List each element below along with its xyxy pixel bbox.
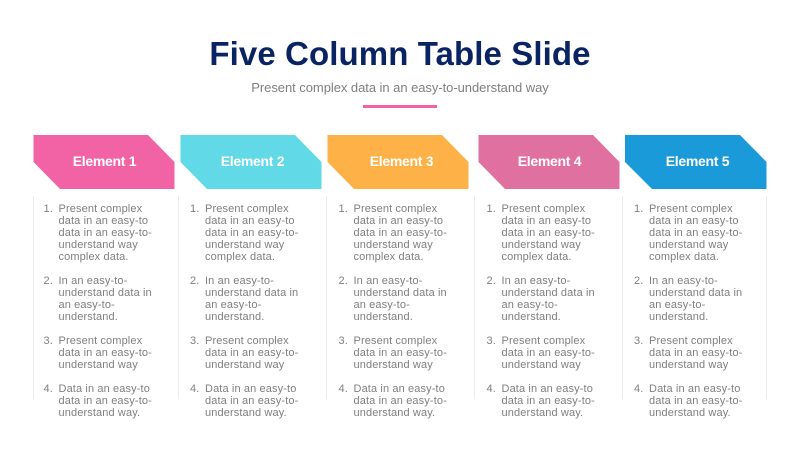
list item 2: In an easy-to-	[649, 275, 718, 287]
list item 4: understand way.	[502, 407, 583, 419]
list item 2	[486, 275, 595, 323]
list item 2: understand.	[502, 311, 561, 323]
panel: element 5: 2.	[634, 275, 643, 287]
list item 1: data in an easy-to-	[649, 227, 742, 239]
list item 2: In an easy-to-	[502, 275, 570, 287]
panel: element 3: 3.	[338, 335, 348, 347]
list item 4: data in an easy-to-	[649, 395, 742, 407]
panel: element 3	[328, 135, 468, 419]
list item 4	[44, 383, 152, 419]
panel: element 2: 2.	[190, 275, 199, 287]
list item 3: data in an easy-to-	[205, 347, 298, 359]
panel: element 2: 3.	[190, 335, 199, 347]
panel: element 2: 1.	[190, 203, 199, 215]
list item 3: Present complex	[649, 335, 733, 347]
list item 3: understand way	[205, 359, 284, 371]
list item 2	[634, 275, 742, 323]
list item 4: understand way.	[649, 407, 731, 419]
list item 4: Data in an easy-to	[205, 383, 296, 395]
header: element 5	[625, 135, 766, 189]
panel: element 3: 2.	[338, 275, 348, 287]
list item 4	[338, 383, 447, 419]
list item 1: Present complex	[205, 203, 289, 215]
list item 4: data in an easy-to-	[502, 395, 595, 407]
list item 1: data in an easy-to-	[354, 227, 447, 239]
panel: element 4: 1.	[486, 203, 496, 215]
panel: element 5: 4.	[634, 383, 643, 395]
list item 3: Present complex	[502, 335, 585, 347]
list item 4: Data in an easy-to	[354, 383, 445, 395]
panel: element 1: 1.	[44, 203, 53, 215]
header: element 3	[328, 135, 468, 189]
header: element 4	[478, 135, 620, 189]
list item 1	[190, 203, 298, 263]
panel: element 5: 1.	[634, 203, 643, 215]
list item 1: complex data.	[502, 251, 572, 263]
list item 1: understand way	[58, 239, 138, 251]
panel: element 3: 4.	[338, 383, 348, 395]
panel: element 2: 4.	[190, 383, 199, 395]
header: element 5: Element 5	[666, 153, 729, 169]
panel: element 3: 1.	[338, 203, 348, 215]
list item 2	[44, 275, 152, 323]
header: element 2	[180, 135, 322, 189]
list item 2: understand.	[354, 311, 413, 323]
list item 2: an easy-to-	[649, 299, 705, 311]
list item 3: understand way	[58, 359, 138, 371]
panel: element 2	[180, 135, 322, 419]
panel: element 1: 4.	[44, 383, 53, 395]
list item 1: understand way	[649, 239, 728, 251]
list item 2: an easy-to-	[502, 299, 558, 311]
list item 3: Present complex	[205, 335, 289, 347]
list item 2: an easy-to-	[354, 299, 410, 311]
list item 2: understand data in	[354, 287, 447, 299]
list item 1: understand way	[354, 239, 433, 251]
list item 2	[338, 275, 447, 323]
list item 3: data in an easy-to-	[58, 347, 152, 359]
list item 2: understand.	[58, 311, 118, 323]
list item 1: Present complex	[649, 203, 733, 215]
list item 2: understand data in	[649, 287, 742, 299]
list item 4: understand way.	[354, 407, 435, 419]
list item 1	[634, 203, 742, 263]
list item 4	[634, 383, 742, 419]
list item 4	[190, 383, 298, 419]
list item 4: Data in an easy-to	[649, 383, 740, 395]
list item 1: understand way	[205, 239, 284, 251]
header: element 3: Element 3	[370, 153, 433, 169]
list item 4: data in an easy-to-	[354, 395, 447, 407]
list item 3: understand way	[354, 359, 433, 371]
panel: element 1: 3.	[44, 335, 53, 347]
list item 1: complex data.	[354, 251, 424, 263]
list item 2: an easy-to-	[205, 299, 261, 311]
list item 1: complex data.	[205, 251, 275, 263]
list item 4: understand way.	[205, 407, 287, 419]
list item 3: understand way	[649, 359, 728, 371]
list item 4: Data in an easy-to	[502, 383, 593, 395]
list item 1: data in an easy-to-	[502, 227, 595, 239]
list item 1: Present complex	[502, 203, 585, 215]
list item 4: data in an easy-to-	[58, 395, 152, 407]
list item 4: Data in an easy-to	[58, 383, 150, 395]
panel: element 5	[625, 135, 766, 419]
list item 1: Present complex	[354, 203, 437, 215]
list item 2: understand data in	[58, 287, 152, 299]
panel: element 4	[478, 135, 620, 419]
list item 1: data in an easy-to-	[205, 227, 298, 239]
list item 3	[634, 335, 742, 371]
list item 4	[486, 383, 595, 419]
list item 2: understand.	[649, 311, 708, 323]
list item 3: Present complex	[58, 335, 142, 347]
title: Five Column Table Slide	[209, 35, 591, 72]
list item 1: data in an easy-to	[58, 215, 148, 227]
list item 1: data in an easy-to	[205, 215, 295, 227]
list item 2: In an easy-to-	[354, 275, 422, 287]
list item 2: understand.	[205, 311, 264, 323]
header: element 1: Element 1	[73, 153, 136, 169]
list item 2: In an easy-to-	[205, 275, 274, 287]
list item 2: In an easy-to-	[58, 275, 127, 287]
list item 3	[338, 335, 447, 371]
list item 1	[338, 203, 447, 263]
panel: element 1: 2.	[44, 275, 53, 287]
list item 4: understand way.	[58, 407, 140, 419]
list item 1: Present complex	[58, 203, 142, 215]
subtitle: Present complex data in an easy-to-understand way	[251, 80, 549, 95]
list item 2: understand data in	[502, 287, 595, 299]
list item 3: Present complex	[354, 335, 437, 347]
header: element 1	[34, 135, 174, 189]
panel: element 4: 4.	[486, 383, 496, 395]
list item 3: data in an easy-to-	[354, 347, 447, 359]
header: element 2: Element 2	[221, 153, 284, 169]
list item 1: data in an easy-to	[354, 215, 443, 227]
list item 1: understand way	[502, 239, 581, 251]
list item 3: data in an easy-to-	[502, 347, 595, 359]
list item 3	[44, 335, 152, 371]
list item 2: an easy-to-	[58, 299, 115, 311]
list item 1: complex data.	[649, 251, 719, 263]
list item 1: complex data.	[58, 251, 129, 263]
list item 3	[190, 335, 298, 371]
list item 4: data in an easy-to-	[205, 395, 298, 407]
list item 3: data in an easy-to-	[649, 347, 742, 359]
list item 1	[486, 203, 595, 263]
panel: element 4: 2.	[486, 275, 496, 287]
list item 3: understand way	[502, 359, 581, 371]
header: element 4: Element 4	[518, 153, 581, 169]
list item 1	[44, 203, 152, 263]
panel: element 4: 3.	[486, 335, 496, 347]
panel: element 5: 3.	[634, 335, 643, 347]
panel: element 1	[34, 135, 174, 419]
list item 2: understand data in	[205, 287, 298, 299]
list item 3	[486, 335, 595, 371]
title underline	[363, 105, 437, 108]
list item 1: data in an easy-to-	[58, 227, 152, 239]
list item 1: data in an easy-to	[649, 215, 739, 227]
list item 1: data in an easy-to	[502, 215, 591, 227]
list item 2	[190, 275, 298, 323]
